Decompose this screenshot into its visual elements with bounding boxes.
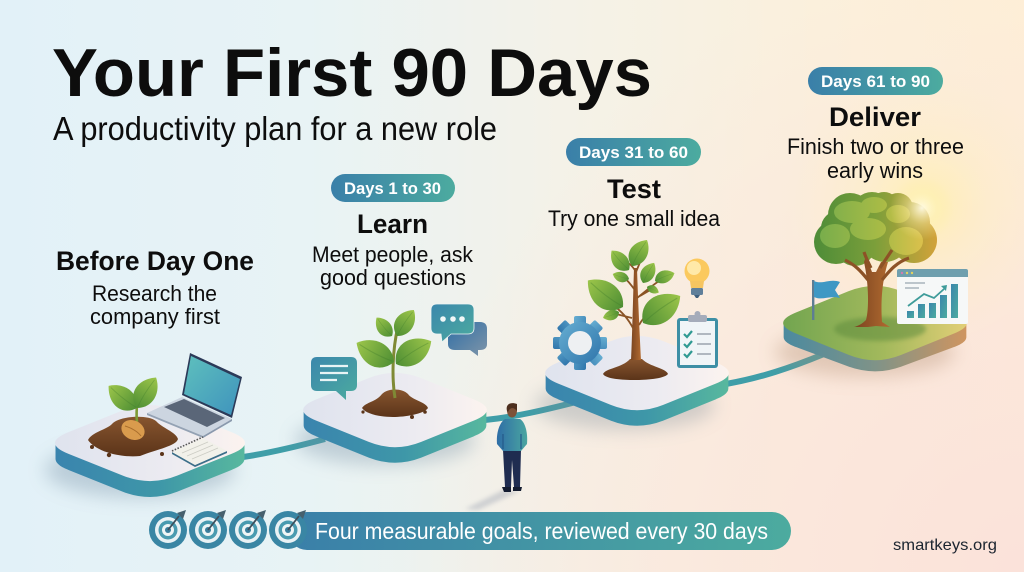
title: Your First 90 Days bbox=[52, 35, 652, 111]
icon: growth chart window bbox=[897, 269, 968, 324]
platform 1 side bbox=[56, 433, 244, 497]
tree canopy bbox=[814, 192, 937, 266]
platform 1 top bbox=[55, 405, 245, 481]
description: Try one small idea bbox=[548, 206, 721, 231]
young tree bbox=[579, 235, 688, 380]
seedling in soil bbox=[350, 305, 437, 419]
heading: Test bbox=[607, 174, 661, 204]
credit: smartkeys.org bbox=[893, 537, 997, 554]
platform 3 top bbox=[545, 336, 729, 410]
pill: days 1 to 30 bbox=[331, 174, 455, 202]
subtitle: A productivity plan for a new role bbox=[53, 110, 497, 147]
icon: light bulb bbox=[684, 258, 710, 298]
icons: four targets bbox=[149, 510, 307, 549]
heading: Before Day One bbox=[56, 246, 254, 276]
icon: gear bbox=[553, 316, 607, 370]
pill: days 31 to 60: Days 31 to 60 bbox=[579, 143, 688, 162]
pill: days 61 to 90 bbox=[808, 67, 943, 95]
description: Research the bbox=[92, 281, 217, 306]
platform 2: learn bbox=[295, 304, 487, 465]
platform 2 top bbox=[303, 373, 487, 447]
step: deliver bbox=[787, 67, 964, 183]
icon: clipboard checklist bbox=[677, 311, 718, 368]
connecting path bbox=[243, 354, 824, 457]
heading: Deliver bbox=[829, 102, 921, 132]
platform 1: before day one bbox=[45, 353, 245, 498]
tree bbox=[814, 176, 954, 327]
soil mound with seed bbox=[88, 371, 178, 457]
step: test bbox=[548, 138, 721, 231]
goals banner bbox=[149, 510, 791, 550]
pill: days 31 to 60 bbox=[566, 138, 701, 166]
heading: Learn bbox=[357, 209, 428, 239]
platform 4: deliver bbox=[775, 176, 968, 377]
icon: message bubble bbox=[311, 357, 357, 400]
tree shadow bbox=[834, 317, 926, 341]
description: company first bbox=[90, 304, 220, 329]
tree trunk bbox=[845, 250, 909, 327]
description bbox=[787, 134, 964, 183]
icon: flag bbox=[812, 280, 840, 320]
platform 4 top bbox=[783, 286, 967, 360]
person bbox=[465, 403, 527, 510]
platform 4 side bbox=[784, 314, 966, 371]
platform 3 side bbox=[546, 363, 728, 426]
pill: days 61 to 90: Days 61 to 90 bbox=[821, 72, 930, 91]
icon: notebook bbox=[172, 437, 227, 467]
description: good questions bbox=[320, 265, 466, 290]
description: early wins bbox=[827, 158, 923, 183]
step: before day one bbox=[56, 246, 254, 329]
description: Finish two or three bbox=[787, 134, 964, 159]
pill: days 1 to 30: Days 1 to 30 bbox=[344, 179, 441, 198]
platform 3: test bbox=[535, 235, 729, 430]
description bbox=[312, 242, 474, 290]
icon: chat bubbles bbox=[431, 304, 487, 356]
banner text: Four measurable goals, reviewed every 30 days bbox=[315, 518, 768, 544]
description: Meet people, ask bbox=[312, 242, 474, 267]
platform 2 side bbox=[304, 400, 486, 463]
icon: laptop bbox=[147, 353, 242, 438]
banner bar bbox=[288, 512, 791, 550]
step: learn bbox=[312, 174, 474, 290]
description bbox=[90, 281, 220, 329]
sun glow bbox=[890, 176, 954, 240]
